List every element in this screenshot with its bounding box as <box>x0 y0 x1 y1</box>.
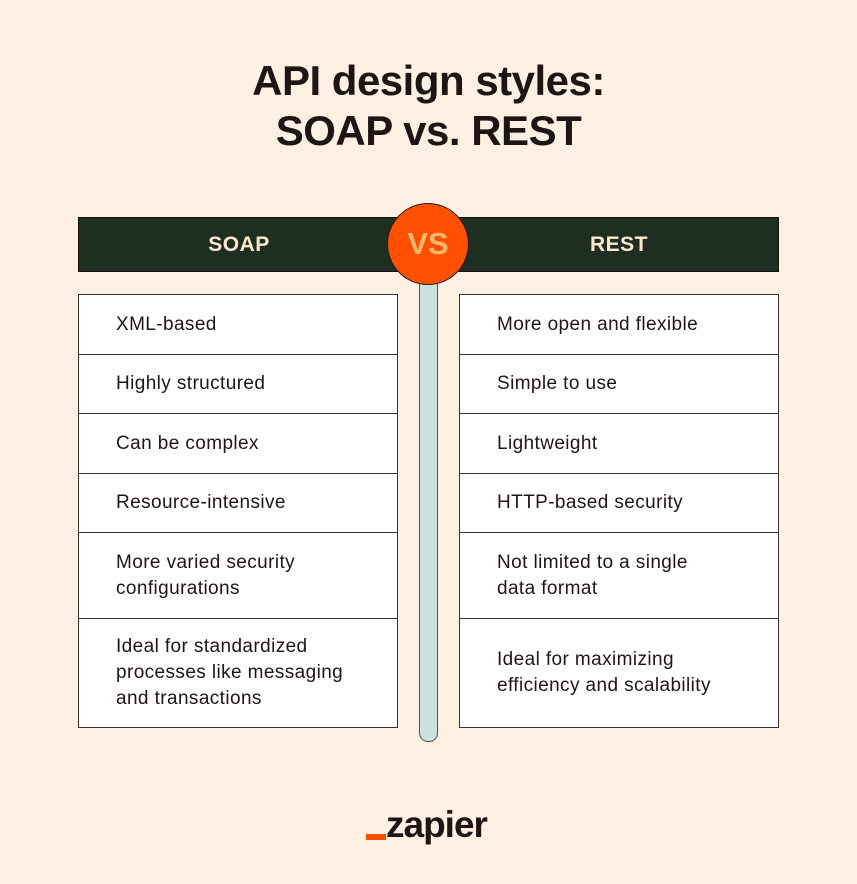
panel: REST: HTTP-based security <box>497 492 683 513</box>
panel: SOAP: configurations <box>116 578 240 598</box>
panel: REST: Lightweight <box>497 432 598 454</box>
panel: REST: efficiency and scalability <box>497 675 711 696</box>
divider pole <box>419 280 438 742</box>
header bar: REST <box>590 233 648 256</box>
vs badge: VS <box>407 226 449 261</box>
panel: REST: Ideal for maximizing <box>497 649 674 670</box>
header bar <box>78 217 779 272</box>
panel: REST: data format <box>497 578 598 598</box>
vs badge <box>387 203 469 285</box>
panel: SOAP: Resource-intensive <box>116 492 286 513</box>
panel: REST <box>459 294 779 728</box>
title: API design styles: <box>252 57 605 104</box>
panel: SOAP: Ideal for standardized <box>116 636 308 657</box>
header bar: SOAP <box>208 233 270 256</box>
title: SOAP vs. REST <box>276 107 581 154</box>
panel: SOAP: and transactions <box>116 688 262 709</box>
panel: REST: Simple to use <box>497 373 617 394</box>
panel: SOAP: More varied security <box>116 552 295 572</box>
logo: zapier: zapier <box>386 804 487 845</box>
panel: REST: Not limited to a single <box>497 552 688 572</box>
panel: SOAP: processes like messaging <box>116 662 343 683</box>
panel: SOAP: Highly structured <box>116 373 265 394</box>
panel: SOAP: Can be complex <box>116 432 259 454</box>
panel: SOAP <box>78 294 398 728</box>
title <box>252 57 605 154</box>
panel: REST: More open and flexible <box>497 314 698 334</box>
panel: SOAP: XML-based <box>116 314 217 334</box>
